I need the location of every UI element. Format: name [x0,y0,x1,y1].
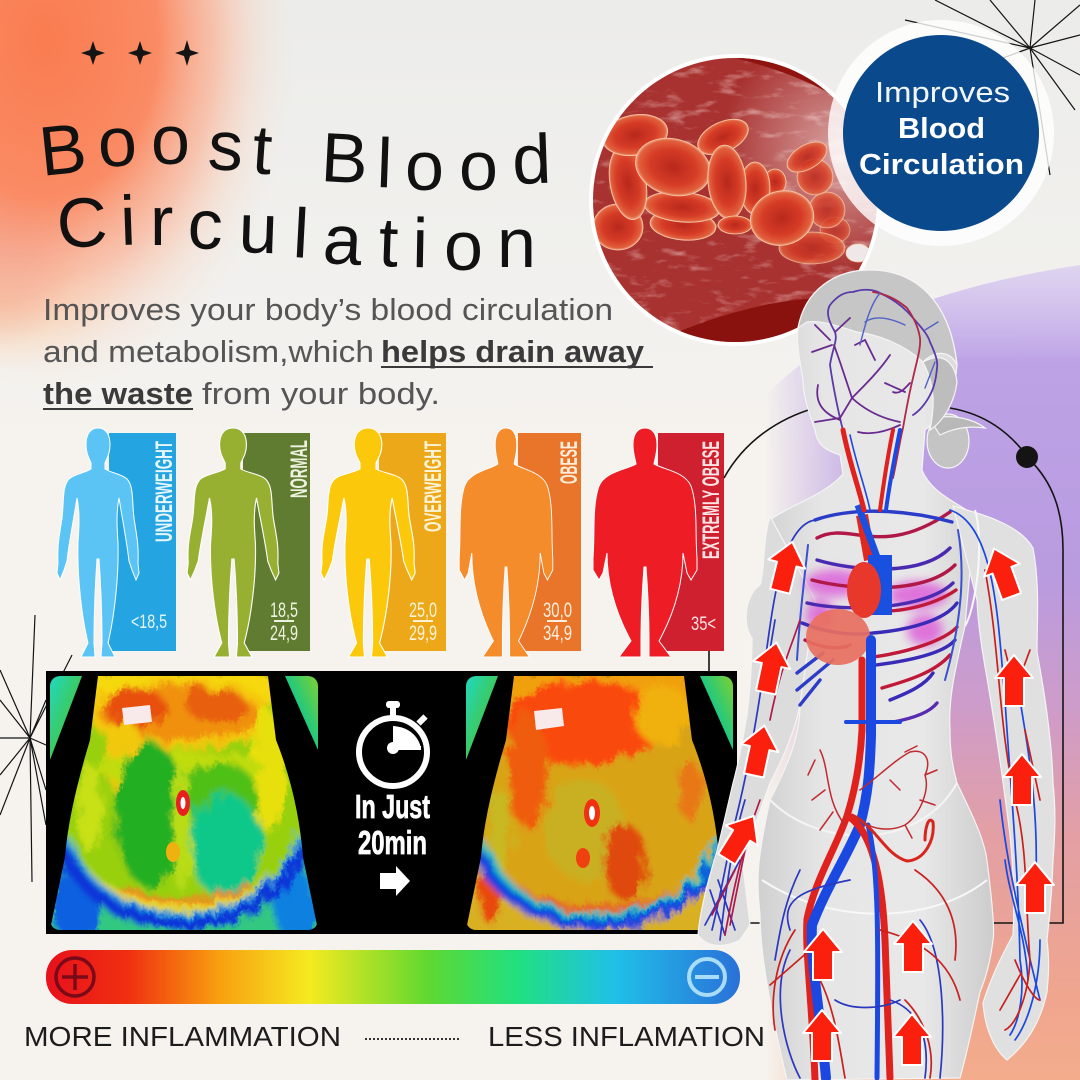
lungs [805,569,948,646]
badge: improves blood circulation: Blood [898,113,985,145]
BMI category: obese: 30,0 [543,599,572,622]
BMI category: overweight: 29,9 [409,622,437,645]
BMI category: underweight: <18,5 [131,612,167,633]
BMI category: overweight [321,428,447,657]
BMI chart [57,428,725,657]
rib cage [797,511,962,722]
stopwatch icon [359,701,428,786]
starburst decoration left [0,615,72,882]
description text: helps drain away [381,334,645,369]
BMI category: extremely obese: EXTREMLY OBESE [698,441,725,559]
BMI category: underweight: UNDERWEIGHT [151,441,178,542]
text: in just 20min: 20min [358,824,427,861]
BMI category: obese: OBESE [556,441,583,484]
starburst decoration top right [905,0,1080,175]
BMI category: normal [187,428,313,657]
icons: three sparkle stars [81,40,199,66]
badge: improves blood circulation: Circulation [859,149,1024,181]
heart and great vessels [806,505,892,665]
title: Circulation [55,181,536,285]
branching vessels [705,510,1040,1078]
description text: Improves your body’s blood circulation [43,292,613,327]
blood vessel circle image [589,50,881,350]
text: in just 20min: In Just [355,788,430,825]
body silhouette [698,270,1055,1080]
title: Blood [319,118,552,205]
label: more inflammation: MORE INFLAMMATION [24,1021,341,1052]
head vessels [812,290,938,478]
BMI category: extremely obese: 35< [691,614,716,635]
badge: improves blood circulation [828,20,1054,246]
arch outline [709,408,1063,923]
BMI category: extremely obese [593,428,725,657]
arrow: right [380,866,410,896]
title [35,101,552,285]
label: less inflammation: LESS INFLAMATION [488,1021,765,1052]
red circulation arrows [711,537,1054,1065]
description text [43,292,653,411]
BMI category: overweight: 25,0 [409,599,437,622]
title: Boost [35,101,275,191]
description text: and metabolism,which [43,334,374,369]
text: in just 20min [355,788,430,861]
thermal image: after [466,676,733,930]
BMI category: normal: NORMAL [286,440,313,498]
description text: the waste [43,376,193,411]
description text: from your body. [202,376,440,411]
BMI category: obese [459,428,583,657]
BMI category: normal: 24,9 [270,622,298,645]
inflammation gradient bar [46,950,740,1004]
anatomical body figure [698,270,1055,1080]
BMI category: obese: 34,9 [543,622,572,645]
BMI category: overweight: OVERWEIGHT [420,441,447,532]
icon: minus [689,959,725,995]
BMI category: underweight [57,428,178,657]
icon: plus [56,958,94,996]
BMI category: normal: 18,5 [270,599,298,622]
badge: improves blood circulation: Improves [875,77,1010,109]
thermal comparison panel [40,670,746,945]
thermal image: before [50,676,318,930]
main arteries and veins [807,430,933,1080]
red blood cells [593,110,870,264]
